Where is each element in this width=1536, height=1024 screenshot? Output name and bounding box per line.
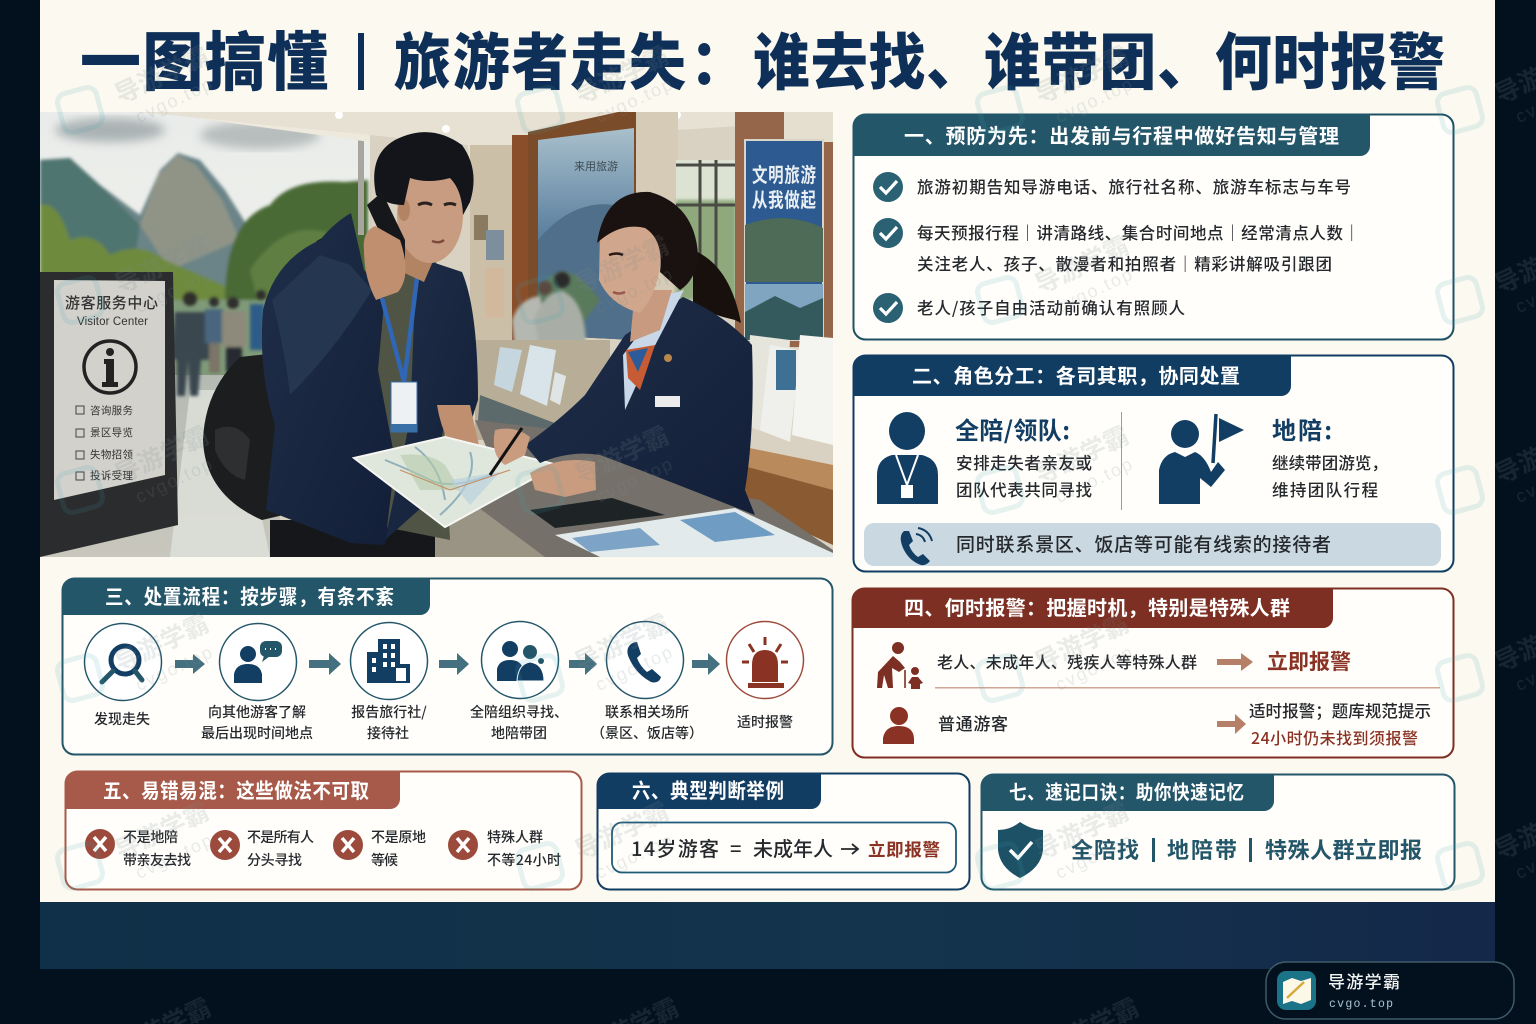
header: prevention: 一、预防为先：出发前与行程中做好告知与管理 [904,120,1339,149]
sleeve fold [272,255,372,395]
step 6: report to police: 适时报警 [737,712,793,732]
watermarks: 导游学霸 [1028,36,1134,111]
mnemonic text: 全陪找 [1071,833,1139,865]
hair [597,192,698,290]
watermarks: 导游学霸 [108,792,214,867]
ordinary tourist row: 普通游客 [938,710,1008,735]
brand badge: 导游学霸 [1328,968,1400,993]
watermarks: 导游学霸 [1028,792,1134,867]
watermarks: 导游学霸 [1028,604,1134,679]
watermarks: cvgo.top [132,73,217,127]
watermarks: 导游学霸 [108,36,214,111]
visitor center sign: 游客服务中心 [65,292,158,313]
header: roles: 二、角色分工：各司其职，协同处置 [912,360,1240,389]
step 6: report to police [726,622,804,732]
back staff [512,270,588,340]
panel: typical example [597,773,970,890]
window right [676,160,736,305]
icon: tour leader [877,412,938,504]
item 1: 旅游初期告知导游电话、旅行社名称、旅游车标志与车号 [917,174,1351,198]
photo: tourist and guide at visitor center: 来用旅游 [574,158,618,174]
map on counter [354,437,558,527]
step 2: ask tourists: 向其他游客了解 [208,702,306,722]
item 2: 关注老人、孩子、散漫者和拍照者｜精彩讲解吸引跟团 [917,251,1332,275]
brand badge [1266,962,1514,1019]
example equation: 未成年人 [753,833,833,862]
mistake 3: 不是原地 [371,827,426,847]
watermarks: 导游学霸 [108,416,214,491]
header: example [597,773,821,809]
title: 谁去找、谁带团、何时报警 [753,13,1445,103]
floor [40,375,280,557]
woman staff member [490,192,755,515]
step 3: report to agency: 报告旅行社/ [351,702,427,722]
header: process: 三、处置流程：按步骤，有条不紊 [105,580,394,610]
header: mnemonic: 七、速记口诀：助你快速记忆 [1009,778,1244,805]
example equation: = [730,833,741,862]
local guide text [1272,411,1388,501]
step 3: report to agency [350,622,428,743]
watermarks: cvgo.top [1052,829,1137,883]
step 1: discover: 发现走失 [94,709,150,729]
icon: ordinary tourist [883,707,914,744]
lanyard and badge [382,270,418,382]
watermarks: 导游学霸 [568,604,674,679]
title: 一图搞懂 [80,11,328,104]
contact band: 同时联系景区、饭店等可能有线索的接待者 [956,530,1331,557]
title: ： [690,13,747,103]
visitor center sign [40,272,178,557]
icon: map logo [1277,971,1316,1010]
mistake 2: 分头寻找 [247,850,302,870]
watermarks: cvgo.top [132,453,217,507]
watermarks: 导游学霸 [568,792,674,867]
watermarks: cvgo.top [592,641,677,695]
ceiling [142,112,735,160]
step 5: contact venues [591,622,703,743]
example equation: 立即报警 [868,837,940,862]
wood cabinet [745,467,833,545]
phone [367,196,405,260]
icon: shield check [998,822,1043,878]
mistake 2 [210,827,314,870]
header: prevention [853,114,1370,156]
watermarks: 导游学霸 [108,226,214,301]
step 4: organise search: 全陪组织寻找、 [470,702,568,722]
keyboard pad [530,498,665,528]
mistake 2: 不是所有人 [247,827,314,847]
large mountain poster [538,128,634,340]
watermarks: cvgo.top [1052,73,1137,127]
panel: when to call police [852,588,1454,758]
mnemonic text [1071,833,1422,865]
header: mnemonic [981,774,1274,811]
tour leader text [955,411,1092,501]
panel: handling process [62,578,832,754]
tour leader text: 全陪/领队: [955,411,1070,446]
desk top [475,420,833,557]
man with backpack on phone [203,132,480,557]
jacket [525,297,755,515]
mistake 3 [333,827,426,870]
special groups row: 老人、未成年人、残疾人等特殊人群 [937,649,1197,673]
header: example: 六、典型判断举例 [632,774,784,804]
item 3: 老人/孩子自由活动前确认有照顾人 [917,295,1186,319]
ponytail [693,250,741,323]
step 1: discover [84,624,162,729]
title: 旅游者走失 [394,13,686,103]
raised hand [364,226,406,300]
footer band [40,902,1495,969]
face features [418,203,456,205]
step 3: report to agency: 接待社 [367,723,409,743]
shirt [378,262,450,540]
watermarks: cvgo.top [132,263,217,317]
step 4: organise search: 地陪带团 [491,723,547,743]
face [599,222,661,313]
crowd in background [171,290,266,396]
mullions [358,135,364,235]
local guide text: 地陪: [1272,411,1332,446]
arrow [175,654,205,674]
visitor center sign: 失物招领 [90,447,134,462]
arrow [692,653,720,675]
header: police: 四、何时报警：把握时机，特别是特殊人群 [904,592,1290,621]
ordinary tourist row: 适时报警；题库规范提示 [1249,698,1431,722]
mistake 4: 特殊人群 [487,827,543,847]
blue poster: 从我做起 [752,185,816,214]
watermarks: cvgo.top [592,73,677,127]
watermarks: 导游学霸 [568,416,674,491]
neck [405,246,432,282]
brochures on desk [555,508,833,557]
header: police [852,588,1333,628]
tour leader text: 安排走失者亲友或 [956,450,1092,474]
arrow [569,653,597,675]
item 2 [873,218,1360,275]
wood columns and wall [470,145,512,360]
watermarks: 导游学霸 [1028,226,1134,301]
shirt and scarf [623,290,684,410]
trousers [270,520,435,557]
visitor center sign: 投诉受理 [90,468,134,483]
brand badge: cvgo.top [1329,998,1393,1011]
mistake 4: 不等24小时 [487,850,561,870]
watermarks: 导游学霸 [568,226,674,301]
counter displays [475,340,610,440]
icon: elderly and child [877,642,923,689]
step 2: ask tourists [201,624,313,743]
name badge [655,396,680,407]
example equation [612,822,956,872]
mnemonic text: 地陪带 [1167,833,1237,865]
hands and pen [494,429,530,465]
header: mistakes: 五、易错易混：这些做法不可取 [103,774,370,804]
step 5: contact venues: （景区、饭店等） [591,723,703,743]
special groups row: 立即报警 [1267,646,1351,676]
watermarks: cvgo.top [132,641,217,695]
header: process [62,578,430,615]
panel: prevention first [853,114,1454,340]
panel: role division [853,355,1454,572]
visitor center sign: 咨询服务 [90,403,134,418]
ordinary tourist row [938,698,1431,749]
header: mistakes [65,771,400,809]
step 4: organise search [470,622,568,743]
backpack [203,354,281,520]
photo: tourist and guide at visitor center [40,108,835,557]
neck [630,290,672,342]
mnemonic text: 特殊人群立即报 [1265,833,1422,865]
hair [374,132,474,215]
head [397,178,463,263]
watermarks: 导游学霸 [108,604,214,679]
panel: common mistakes [65,771,582,890]
header: roles [853,355,1291,396]
tour leader text: 团队代表共同寻找 [956,477,1092,501]
local guide text: 维持团队行程 [1272,477,1378,501]
blue poster [745,140,823,340]
item 3 [873,293,1186,323]
visitor center sign: 景区导览 [90,425,133,440]
watermarks: 导游学霸 [568,36,674,111]
arrow [309,653,341,675]
special groups row [937,646,1351,676]
arrow [439,653,469,675]
item 2: 每天预报行程｜讲清路线、集合时间地点｜经常清点人数｜ [917,220,1360,244]
watermarks: cvgo.top [132,829,217,883]
watermarks: cvgo.top [592,263,677,317]
window sky [40,112,370,272]
mistake 1: 带亲友去找 [123,850,191,870]
watermarks: cvgo.top [1052,641,1137,695]
lower hand [437,405,479,444]
watermarks: cvgo.top [592,453,677,507]
watermarks: cvgo.top [592,829,677,883]
ordinary tourist row: 24小时仍未找到须报警 [1251,725,1418,749]
panel: mnemonic [981,774,1454,890]
mistake 1 [85,827,191,870]
watermarks: cvgo.top [1052,263,1137,317]
step 2: ask tourists: 最后出现时间地点 [201,723,313,743]
jacket [262,213,395,545]
visitor center sign: Visitor Center [77,316,148,328]
mistake 1: 不是地陪 [123,827,178,847]
watermarks: cvgo.top [1052,453,1137,507]
example equation: 14岁游客 [631,833,719,862]
mistake 3: 等候 [371,850,398,870]
mistake 4 [448,827,561,870]
icon: local guide with flag [1159,414,1244,504]
watermarks: 导游学霸 [1028,416,1134,491]
contact band [864,523,1441,566]
title [80,11,1445,104]
step 5: contact venues: 联系相关场所 [605,702,689,722]
blue poster: 文明旅游 [752,160,816,189]
local guide text: 继续带团游览， [1272,450,1388,474]
